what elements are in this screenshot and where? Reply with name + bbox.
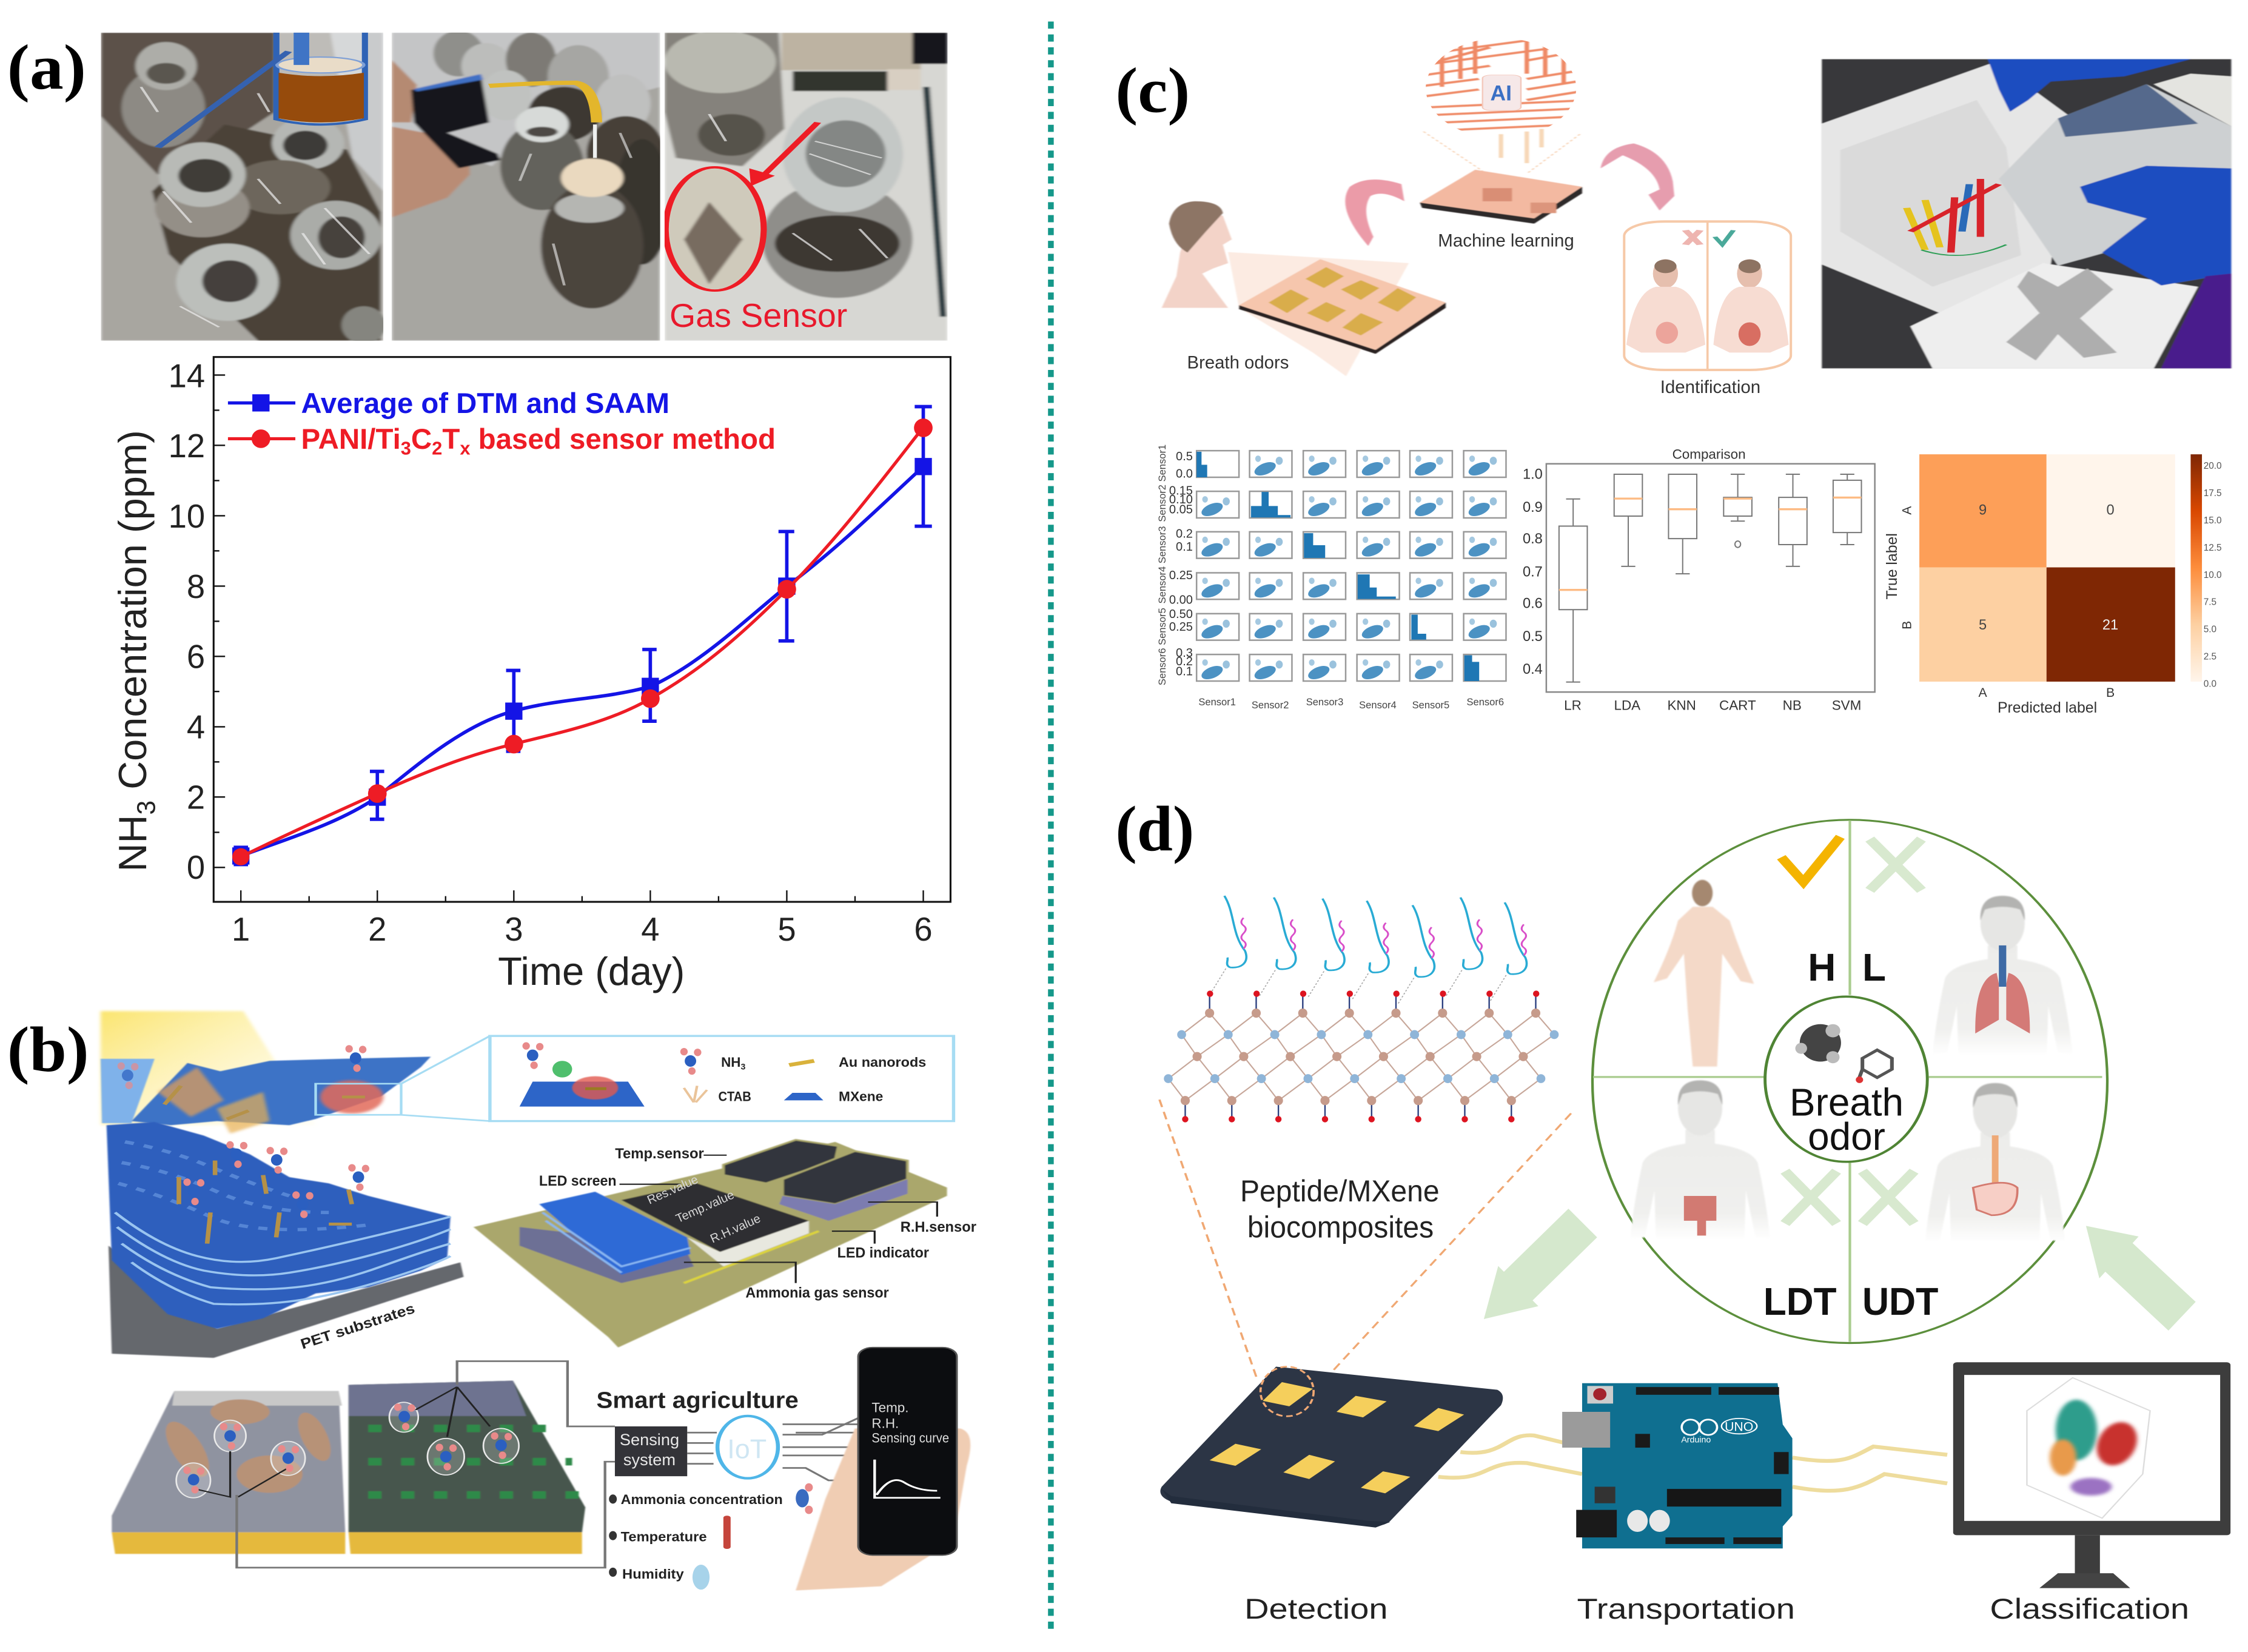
box plot y tick labels xyxy=(1523,467,1543,677)
panel b label: (b) xyxy=(7,1014,89,1086)
curved arrow to identification xyxy=(1600,143,1674,210)
callout labels: MXene xyxy=(839,1089,883,1104)
monitor with scatter clusters xyxy=(1953,1362,2230,1588)
x axis tick labels: 1 xyxy=(232,911,250,948)
panel d label: (d) xyxy=(1115,793,1194,865)
monitored quantities: Temperature xyxy=(621,1529,707,1544)
panel b xyxy=(7,1011,976,1591)
callout labels: CTAB xyxy=(718,1089,751,1104)
colour bar tick labels: 12.5 xyxy=(2204,543,2222,553)
y axis tick labels: 8 xyxy=(187,568,205,605)
sensor array chip xyxy=(1228,252,1446,376)
box plot model labels: NB xyxy=(1783,697,1802,713)
hand and phone xyxy=(796,1348,970,1591)
breath odor label: odor xyxy=(1808,1115,1885,1158)
breath odor circle with four quadrants xyxy=(1592,820,2107,1343)
callout box xyxy=(490,1036,953,1121)
icon: lungs xyxy=(1933,896,2073,1055)
pair plot tick labels: 0.10 xyxy=(1169,493,1193,506)
pair plot tick labels: 0.25 xyxy=(1169,620,1193,634)
divider: dashed vertical line xyxy=(1050,21,1052,1630)
y axis tick labels: 12 xyxy=(169,428,205,465)
person exhaling xyxy=(1162,201,1232,308)
quadrant letters xyxy=(1763,945,1938,1323)
x axis title: Time (day) xyxy=(498,949,685,993)
box plot model labels: LR xyxy=(1564,697,1582,713)
screen values on device: Temp.value xyxy=(674,1188,736,1226)
monitored quantities: Ammonia concentration xyxy=(621,1492,783,1507)
legend: Average of DTM and SAAM xyxy=(301,388,669,420)
box plot y tick labels: 0.8 xyxy=(1523,531,1543,547)
y axis tick labels: 0 xyxy=(187,849,205,886)
y axis tick labels xyxy=(169,357,205,886)
icon: aromatic molecule xyxy=(1856,1050,1892,1083)
workflow captions: Machine learning xyxy=(1438,231,1574,251)
legend: PANI/Ti xyxy=(301,423,400,455)
MXene layers with nanorods on PET substrate xyxy=(101,1011,464,1358)
icon: molecule dark xyxy=(1795,1024,1841,1063)
y axis tick labels: 2 xyxy=(187,779,205,816)
heatmap values: 9 xyxy=(1979,503,1987,519)
pair plot axis labels: Sensor1 xyxy=(1156,445,1168,482)
AI text: AI xyxy=(1491,81,1512,105)
colour bar tick labels: 7.5 xyxy=(2204,597,2216,608)
callout labels: Au nanorods xyxy=(839,1055,926,1070)
quadrant letters: LDT xyxy=(1763,1280,1836,1323)
callout labels: NH xyxy=(721,1055,741,1070)
legend: x xyxy=(460,437,470,458)
x axis tick labels: 4 xyxy=(641,911,659,948)
y axis title: 3 xyxy=(132,801,161,815)
photo: jars with extraction schematic xyxy=(101,33,386,344)
pipeline captions: Detection xyxy=(1244,1593,1388,1625)
panel c label: (c) xyxy=(1115,55,1190,126)
phone screen text xyxy=(871,1400,949,1445)
quadrant letters: UDT xyxy=(1862,1280,1938,1323)
panel d xyxy=(1115,793,2230,1625)
pair plot tick labels: 0.05 xyxy=(1169,503,1193,516)
screen values on device xyxy=(645,1173,763,1246)
box plot y tick labels: 0.4 xyxy=(1523,662,1543,677)
pair plot axis labels: Sensor4 xyxy=(1359,699,1397,711)
box plot model labels: SVM xyxy=(1832,697,1861,713)
breath odor label xyxy=(1790,1080,1904,1158)
x axis tick labels xyxy=(232,911,933,948)
blue series with error bars xyxy=(232,406,932,865)
box plot y tick labels: 0.9 xyxy=(1523,500,1543,515)
legend: T xyxy=(442,423,460,455)
identification box xyxy=(1624,221,1791,370)
Arduino text: UNO xyxy=(1725,1419,1753,1434)
pair plot tick labels: 0.5 xyxy=(1176,450,1193,463)
molecules in MXene illustration xyxy=(118,1043,702,1494)
callout labels: 3 xyxy=(740,1063,745,1072)
sensing system label xyxy=(620,1430,679,1469)
pipeline captions xyxy=(1244,1593,2189,1625)
pair plot axis labels: Sensor3 xyxy=(1306,696,1343,708)
plot frame xyxy=(213,357,950,902)
peptide strands xyxy=(1210,896,1526,1004)
screen values on device: R.H.value xyxy=(708,1212,763,1246)
colour bar tick labels: 17.5 xyxy=(2204,488,2222,499)
pair plot tick labels: 0.1 xyxy=(1176,540,1193,554)
status bullets and icons xyxy=(609,1483,813,1590)
zoom callout connector xyxy=(316,1036,490,1121)
confusion matrix heatmap xyxy=(1919,454,2175,682)
callout labels xyxy=(718,1055,926,1104)
box plot y tick labels: 0.5 xyxy=(1523,629,1543,645)
box plot y tick labels: 1.0 xyxy=(1523,467,1543,483)
box plot model labels: CART xyxy=(1719,697,1756,713)
device leader lines xyxy=(620,1155,937,1283)
device labels: Temp.sensor xyxy=(615,1146,704,1162)
colour bar tick labels: 15.0 xyxy=(2204,515,2222,526)
sensing system chip xyxy=(615,1426,687,1476)
Arduino text: Arduino xyxy=(1681,1435,1711,1445)
heatmap axis labels: True label xyxy=(1884,533,1901,600)
heatmap axis labels: A xyxy=(1979,685,1988,700)
pair plot axis labels: Sensor5 xyxy=(1412,699,1449,711)
x axis tick labels: 2 xyxy=(368,911,386,948)
pair plot tick labels: 0.1 xyxy=(1176,665,1193,679)
colour bar tick labels: 0.0 xyxy=(2204,679,2216,689)
icon: healthy body xyxy=(1654,880,1754,1067)
heatmap values: 0 xyxy=(2106,503,2115,519)
heatmap values: 5 xyxy=(1979,617,1987,633)
y axis title: Concentration (ppm) xyxy=(110,430,155,801)
box plot model labels: LDA xyxy=(1614,697,1640,713)
x axis tick labels: 5 xyxy=(777,911,796,948)
red series xyxy=(232,418,933,865)
pipeline captions: Classification xyxy=(1990,1593,2189,1625)
legend: 3 xyxy=(401,437,411,458)
heatmap axis labels: B xyxy=(1899,621,1914,630)
device labels: R.H.sensor xyxy=(901,1220,976,1235)
pair plot tick labels: 0.50 xyxy=(1169,608,1193,621)
phone screen text: Sensing curve xyxy=(871,1430,949,1445)
connecting cables xyxy=(1438,1435,1947,1491)
checkmark xyxy=(1781,837,1840,882)
breath odor label: Breath xyxy=(1790,1080,1904,1124)
pair plot axis labels: Sensor1 xyxy=(1198,696,1236,708)
phone screen text: R.H. xyxy=(871,1416,899,1431)
pair plot tick labels: 0.00 xyxy=(1169,593,1193,606)
pair plot axis labels: Sensor3 xyxy=(1156,526,1168,563)
biocomposite caption xyxy=(1240,1174,1440,1244)
IoT ring xyxy=(717,1416,778,1479)
box plot y tick labels: 0.6 xyxy=(1523,596,1543,611)
x axis tick labels: 6 xyxy=(914,911,933,948)
greenhouses with sensing nodes xyxy=(112,1361,615,1568)
device labels: LED screen xyxy=(539,1174,617,1189)
panel a xyxy=(7,30,950,993)
circuit board with chips xyxy=(474,1140,947,1348)
device labels: PET substrates xyxy=(299,1301,417,1352)
biocomposite caption: biocomposites xyxy=(1247,1210,1434,1244)
illustration shapes for panel b xyxy=(101,1011,970,1591)
pair plot tick labels: 0.3 xyxy=(1176,646,1193,660)
heatmap values: 21 xyxy=(2102,617,2118,633)
y axis tick labels: 4 xyxy=(187,709,205,746)
pair plot axis labels xyxy=(1156,445,1504,711)
Arduino UNO board xyxy=(1562,1383,1793,1548)
heatmap colour bar xyxy=(2190,454,2202,682)
legend: based sensor method xyxy=(470,423,776,455)
photo caption: gas sensor: Gas Sensor xyxy=(669,297,847,334)
pair plot tick labels: 0.25 xyxy=(1169,569,1193,582)
legend xyxy=(228,388,776,458)
pair plot axis labels: Sensor6 xyxy=(1466,696,1504,708)
colour bar tick labels: 20.0 xyxy=(2204,461,2222,471)
workflow captions: Breath odors xyxy=(1187,353,1289,373)
pair plot axis labels: Sensor6 xyxy=(1156,648,1168,685)
device labels xyxy=(299,1146,976,1352)
x axis tick labels: 3 xyxy=(505,911,523,948)
photo: sensor chamber in gloved hands xyxy=(1822,59,2231,368)
screen values on device: Res.value xyxy=(645,1173,700,1207)
sensor array board xyxy=(1160,1367,1503,1528)
pair plot tick labels: 0.2 xyxy=(1176,655,1193,668)
pair plot tick labels: 0.2 xyxy=(1176,528,1193,541)
field photographs of compost jars and gas sensor xyxy=(101,30,948,344)
quadrant letters: L xyxy=(1862,945,1886,989)
cross marks xyxy=(1785,839,1921,1223)
machine learning board xyxy=(1420,129,1582,224)
pair plot axis labels: Sensor2 xyxy=(1252,699,1289,711)
colour bar tick labels xyxy=(2204,461,2222,689)
chart shapes xyxy=(1196,451,2202,692)
sensor connector wires xyxy=(1907,179,2006,255)
pair plot axis labels: Sensor2 xyxy=(1156,485,1168,522)
workflow captions xyxy=(1187,231,1760,397)
panel a label: (a) xyxy=(7,32,86,104)
pair plot axis labels: Sensor5 xyxy=(1156,608,1168,645)
smart agriculture heading: Smart agriculture xyxy=(596,1388,799,1414)
colour bar tick labels: 10.0 xyxy=(2204,570,2222,580)
y axis title: NH xyxy=(110,815,155,871)
y axis tick labels: 10 xyxy=(169,498,205,535)
curved arrow to machine learning xyxy=(1345,180,1404,246)
y axis tick labels: 6 xyxy=(187,639,205,676)
icon: lower digestive tract xyxy=(1630,1080,1770,1240)
monitored quantities xyxy=(621,1492,783,1582)
inner circle xyxy=(1765,996,1927,1162)
quadrant letters: H xyxy=(1808,945,1836,989)
pair plot tick labels: 0.15 xyxy=(1169,485,1193,498)
icon: upper digestive tract xyxy=(1925,1083,2065,1243)
green flow arrows xyxy=(1484,1209,2196,1331)
MXene lattice xyxy=(1164,990,1559,1123)
heatmap values xyxy=(1979,503,2118,633)
AI chip badge xyxy=(1483,75,1521,110)
panel c xyxy=(1115,34,2231,716)
box plot model labels: KNN xyxy=(1667,697,1696,713)
device labels: Ammonia gas sensor xyxy=(745,1286,889,1301)
workflow captions: Identification xyxy=(1660,377,1760,397)
box plot y tick labels: 0.7 xyxy=(1523,564,1543,580)
pair plot axis labels: Sensor4 xyxy=(1156,566,1168,603)
phone screen text: Temp. xyxy=(871,1400,909,1415)
heatmap axis labels: A xyxy=(1899,506,1914,515)
circuit traces xyxy=(687,1418,858,1480)
device labels: LED indicator xyxy=(837,1245,929,1261)
line chart: NH3 concentration by day xyxy=(110,357,950,993)
sensor pair plot grid xyxy=(1196,451,1506,681)
model comparison box plot xyxy=(1546,464,1875,692)
AI circuit brain xyxy=(1426,40,1576,131)
biocomposite caption: Peptide/MXene xyxy=(1240,1174,1440,1208)
breath analysis workflow illustration xyxy=(1162,34,2231,376)
sensing system label: system xyxy=(623,1450,676,1469)
photo: handheld detector sampling a jar xyxy=(392,30,670,341)
legend: C xyxy=(411,423,432,455)
pair plot tick labels: 0.0 xyxy=(1176,467,1193,480)
y axis tick labels: 14 xyxy=(169,357,205,394)
shapes for panel d xyxy=(1159,820,2230,1588)
Arduino text xyxy=(1681,1419,1753,1445)
pipeline captions: Transportation xyxy=(1577,1593,1795,1625)
IoT label: IoT xyxy=(727,1433,767,1464)
heatmap axis labels xyxy=(1884,506,2115,716)
heatmap axis labels: B xyxy=(2106,685,2115,700)
box plot model labels xyxy=(1564,697,1861,713)
colour bar tick labels: 5.0 xyxy=(2204,625,2216,635)
legend: 2 xyxy=(432,437,442,458)
box plot title: Comparison xyxy=(1673,447,1746,462)
dashed zoom lines xyxy=(1159,1100,1571,1380)
photo: jar with gas sensor and red annotation xyxy=(665,30,948,341)
heatmap axis labels: Predicted label xyxy=(1998,700,2097,716)
monitored quantities: Humidity xyxy=(622,1566,684,1582)
pair plot tick labels xyxy=(1169,450,1193,679)
axis ticks xyxy=(213,375,924,902)
sensing system label: Sensing xyxy=(620,1430,679,1449)
colour bar tick labels: 2.5 xyxy=(2204,652,2216,662)
